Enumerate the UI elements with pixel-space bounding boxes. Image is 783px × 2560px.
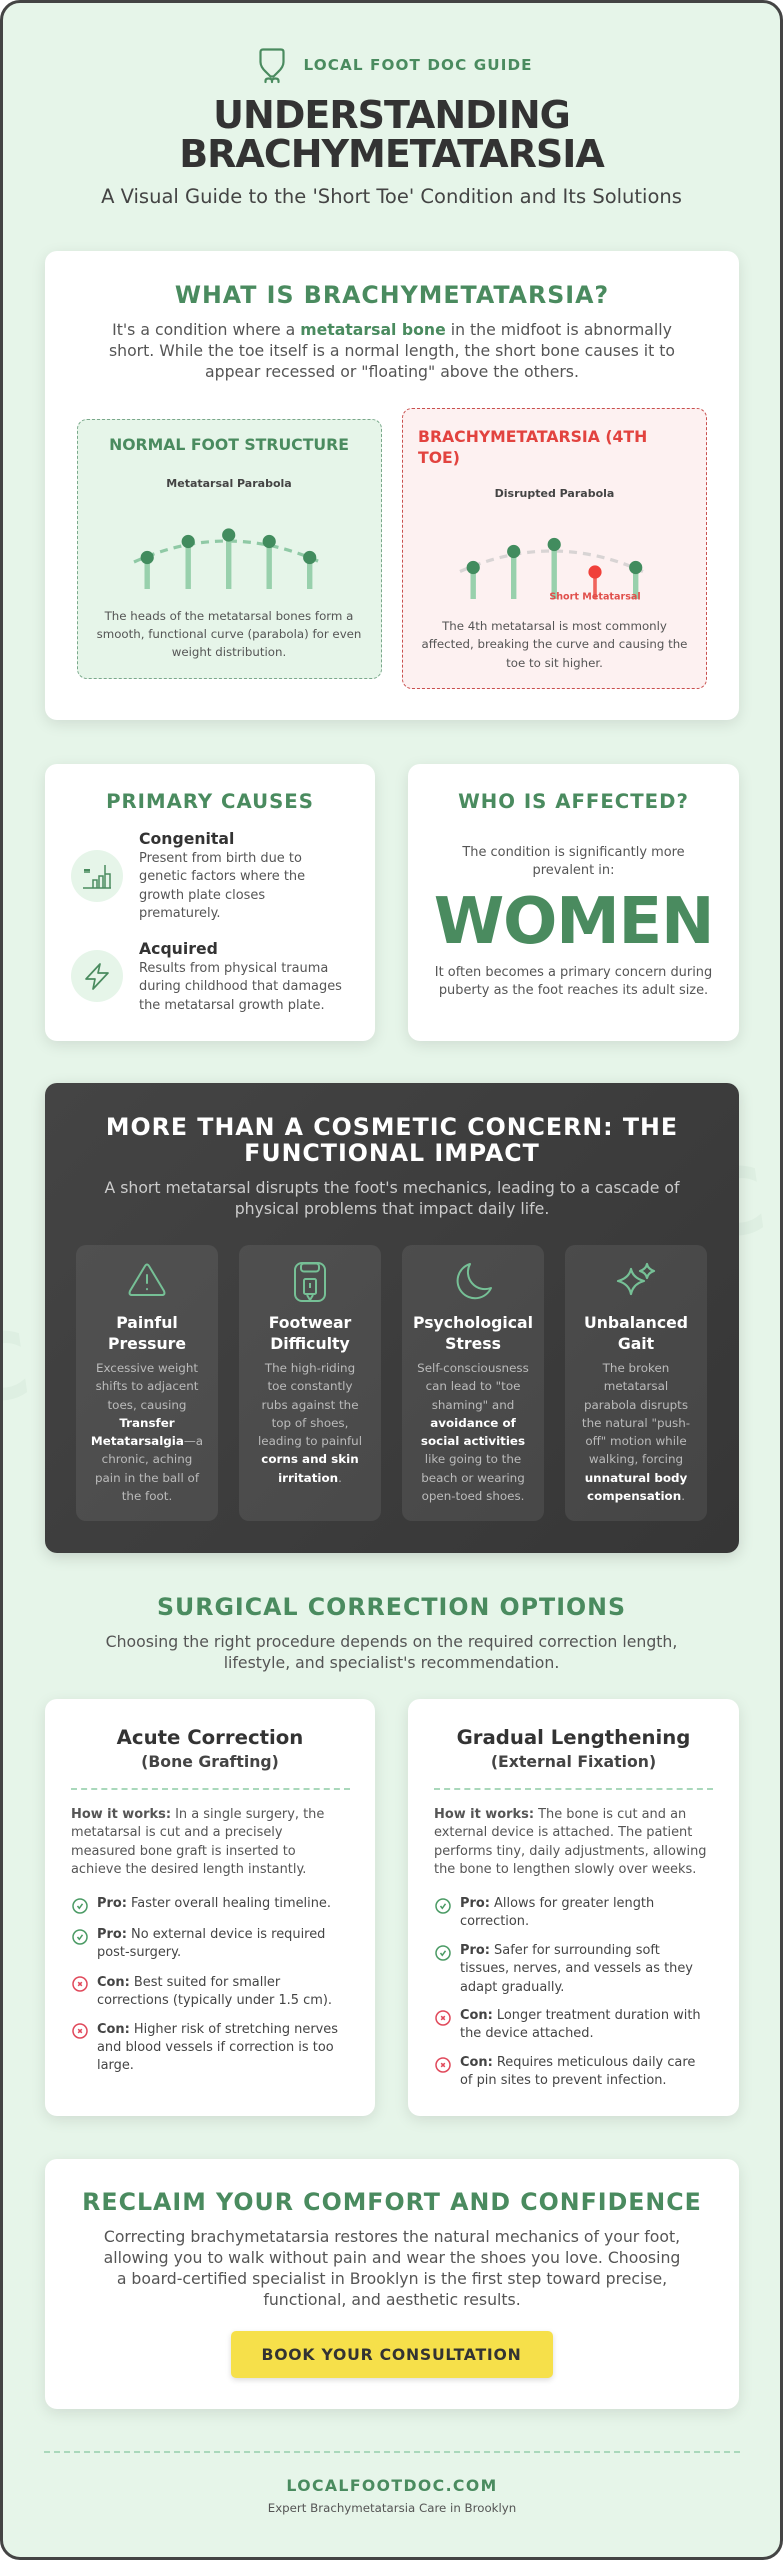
caption: The 4th metatarsal is most commonly [442,619,667,633]
title: Gait [618,1334,654,1353]
header [101,48,682,208]
heading: RECLAIM YOUR COMFORT AND CONFIDENCE [82,2188,702,2216]
surgical options intro: lifestyle, and specialist's recommendation. [224,1652,559,1672]
description: leading to painful [258,1434,362,1448]
panel: functional impact [45,1083,739,1553]
dashed rule [71,1788,350,1790]
pro [460,1942,693,1997]
con [460,2007,701,2044]
body text: a board-certified specialist in Brooklyn is the first step toward precise, [117,2269,667,2288]
title: Acquired [139,939,218,958]
description: shaming" and [432,1398,514,1412]
how it works: performs tiny, daily adjustments, allowing [434,1844,707,1859]
icon: foot logo [259,48,285,84]
description: parabola disrupts [584,1398,688,1412]
description: Metatarsalgia—a [91,1434,203,1448]
how it works: How it works: The bone is cut and an [434,1807,686,1822]
card: footwear difficulty [239,1245,381,1521]
how it works: external device is attached. The patient [434,1825,692,1840]
heading: WHAT IS BRACHYMETATARSIA? [175,281,609,309]
title [108,1313,186,1353]
how it works: the bone to lengthen slowly over weeks. [434,1862,696,1877]
icon: warning triangle [128,1264,166,1296]
intro text: short. While the toe itself is a normal length, the short bone causes it to [109,340,675,360]
description: The broken [603,1361,669,1375]
icon: shoe device [294,1262,326,1302]
description: top of shoes, [272,1416,348,1430]
heading: NORMAL FOOT STRUCTURE [109,434,349,454]
description [91,1361,203,1503]
heading: FUNCTIONAL IMPACT [244,1138,540,1166]
description: genetic factors where the [139,869,305,884]
caption: The heads of the metatarsal bones form a [105,608,353,622]
con [460,2054,695,2091]
chart: normal parabola [133,528,319,589]
how it works [434,1807,707,1877]
how it works: measured bone graft is inserted to [71,1844,296,1859]
heading: WHO IS AFFECTED? [458,790,689,812]
pro [460,1895,654,1932]
panel: acute correction [45,1699,375,2116]
subtitle: (Bone Grafting) [141,1752,279,1771]
intro text [104,1178,680,1218]
description: can lead to "toe [426,1379,520,1393]
con: Con: Higher risk of stretching nerves [97,2022,338,2036]
icon: cross [435,2010,451,2026]
card: painful pressure [76,1245,218,1521]
intro text [109,320,675,380]
con [97,2022,338,2073]
heading: MORE THAN A COSMETIC CONCERN: THE [106,1112,678,1140]
title [179,93,605,176]
description: like going to the [425,1452,521,1466]
caption [97,608,361,659]
intro text: It's a condition where a metatarsal bone in the midfoot is abnormally [112,320,672,338]
description: during childhood that damages [139,979,342,994]
follow-up text [435,965,712,998]
caption [422,619,687,670]
title: Unbalanced [584,1313,688,1332]
how it works [71,1807,324,1877]
description: the foot. [122,1489,172,1503]
description [417,1361,529,1503]
description: compensation. [587,1489,685,1503]
heading: TOE) [418,448,460,466]
pro: tissues, nerves, and vessels as they [460,1961,693,1976]
panel: normal foot [76,418,382,678]
title: Gradual Lengthening [457,1726,690,1749]
icon: check [72,1929,88,1945]
card: unbalanced gait [565,1245,707,1521]
body text [45,2226,739,2310]
con: Con: Best suited for smaller [97,1974,280,1990]
con: Con: Requires meticulous daily care [460,2055,695,2070]
title: Difficulty [270,1334,350,1353]
description [139,961,342,1013]
surgical options intro: Choosing the right procedure depends on the required correction length, [106,1632,677,1650]
title [584,1313,688,1353]
chart: disrupted parabola [460,538,644,602]
icon: lightning bolt [71,950,123,1002]
pro [97,1927,325,1960]
cause: acquired [71,939,342,1013]
description: prematurely. [139,906,221,921]
diagram label: Disrupted Parabola [495,487,614,500]
description: chronic, aching [102,1452,192,1466]
surgical options heading: SURGICAL CORRECTION OPTIONS [157,1593,626,1621]
intro text: physical problems that impact daily life. [235,1198,549,1218]
follow-up text: It often becomes a primary concern during [435,965,712,980]
tagline: Expert Brachymetatarsia Care in Brooklyn [268,2501,516,2515]
icon: cross [72,2023,88,2039]
description: The high-riding [265,1361,355,1375]
description: corns and skin [261,1452,359,1466]
title: Painful [116,1313,178,1332]
pro: adapt gradually. [460,1980,564,1995]
caption: affected, breaking the curve and causing the [422,637,687,651]
description: rubs against the [261,1398,359,1412]
how it works: achieve the desired length instantly. [71,1862,306,1877]
title [269,1313,352,1353]
con: Con: Longer treatment duration with [460,2008,701,2023]
lead text [462,845,685,878]
description: Transfer [119,1416,175,1430]
body text: allowing you to walk without pain and wear the shoes you love. Choosing [104,2248,680,2267]
heading [106,1112,678,1166]
description: toe constantly [267,1379,353,1393]
icon: moon [456,1263,492,1300]
follow-up text: puberty as the foot reaches its adult size. [439,983,708,998]
title [413,1313,533,1353]
con: of pin sites to prevent infection. [460,2073,667,2088]
description: avoidance of [430,1416,516,1430]
pro: Pro: No external device is required [97,1927,325,1942]
description: pain in the ball of [95,1471,199,1485]
description: open-toed shoes. [422,1489,524,1503]
con: and blood vessels if correction is too [97,2040,334,2055]
dashed rule [434,1788,713,1790]
description: the natural "push- [582,1416,690,1430]
how it works: How it works: In a single surgery, the [71,1807,324,1822]
button [230,2331,552,2378]
footer [44,2451,740,2521]
description: irritation. [278,1471,342,1485]
caption: weight distribution. [172,645,286,659]
description [258,1361,362,1485]
panel: gradual lengthening [408,1699,739,2116]
icon: cross [72,1976,88,1992]
title: Stress [445,1334,501,1353]
subtitle: (External Fixation) [491,1752,656,1771]
icon: cross [435,2057,451,2073]
pro: post-surgery. [97,1945,181,1960]
how it works: metatarsal is cut and a precisely [71,1825,283,1840]
intro text: A short metatarsal disrupts the foot's mechanics, leading to a cascade of [104,1178,680,1196]
watermark letter right: C [691,1146,773,1261]
heading: PRIMARY CAUSES [106,790,314,812]
pro: Pro: Faster overall healing timeline. [97,1896,331,1911]
pro: correction. [460,1914,529,1929]
icon: check [435,1898,451,1914]
panel: brachymetatarsia [402,408,707,689]
card: psychological stress [402,1245,544,1521]
panel: primary causes [45,764,375,1041]
heading [418,426,647,466]
title: Acute Correction [117,1726,303,1749]
body text: Correcting brachymetatarsia restores the natural mechanics of your foot, [104,2227,680,2246]
icon: check [72,1898,88,1914]
description [139,851,305,921]
description: beach or wearing [421,1471,525,1485]
description: the metatarsal growth plate. [139,998,325,1013]
con: large. [97,2058,134,2073]
panel: what is brachymetatarsia [45,251,739,720]
description: metatarsal [604,1379,668,1393]
icon: check [435,1945,451,1961]
body text: functional, and aesthetic results. [263,2290,521,2309]
caption: toe to sit higher. [506,656,603,670]
intro text: appear recessed or "floating" above the others. [205,362,579,380]
description: Excessive weight [96,1361,198,1375]
pro: Pro: Allows for greater length [460,1896,654,1911]
big stat: WOMEN [434,885,713,959]
website: LOCALFOOTDOC.COM [286,2476,498,2495]
lead text: prevalent in: [533,863,614,878]
description: Self-consciousness [417,1361,529,1375]
eyebrow: LOCAL FOOT DOC GUIDE [304,56,533,74]
title: Congenital [139,829,234,848]
description: shifts to adjacent [96,1379,198,1393]
title: UNDERSTANDING [213,93,570,137]
cause: congenital [71,829,305,921]
con [97,1974,332,2008]
con: the device attached. [460,2026,594,2041]
description [582,1361,690,1503]
panel: call to action [45,2159,739,2409]
title: Footwear [269,1313,351,1332]
title: Psychological [413,1313,533,1332]
icon: sparkles [616,1262,656,1296]
diagram label: Metatarsal Parabola [166,476,292,490]
caption: smooth, functional curve (parabola) for even [97,627,361,641]
heading: BRACHYMETATARSIA (4TH [418,426,647,446]
title: BRACHYMETATARSIA [179,132,604,176]
title: Pressure [108,1334,186,1353]
description: growth plate closes [139,888,265,903]
subtitle: A Visual Guide to the 'Short Toe' Condition and Its Solutions [101,185,682,208]
description: walking, forcing [589,1452,683,1466]
pro: Pro: Safer for surrounding soft [460,1943,660,1958]
panel: who is affected [408,764,739,1041]
description: Present from birth due to [139,851,302,866]
surgical options intro [106,1632,677,1672]
description: off" motion while [585,1434,687,1448]
description: unnatural body [585,1471,687,1485]
lead text: The condition is significantly more [462,845,685,860]
chart: disrupted parabola: Short Metatarsal [549,592,641,602]
button: BOOK YOUR CONSULTATION [262,2345,521,2364]
description: social activities [421,1434,525,1448]
con: corrections (typically under 1.5 cm). [97,1993,332,2008]
description: Results from physical trauma [139,961,328,976]
icon: growth chart [71,850,123,902]
description: toes, causing [108,1398,186,1412]
